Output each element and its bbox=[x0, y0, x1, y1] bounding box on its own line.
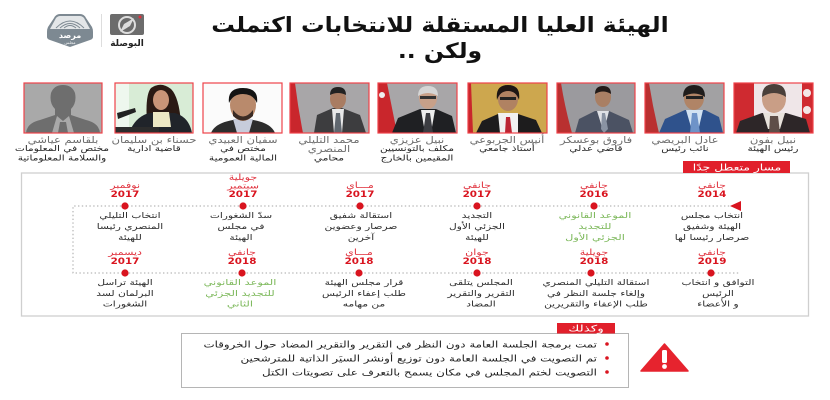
event: Nov 2017 bbox=[97, 181, 163, 243]
also label: وكذلك bbox=[568, 323, 604, 335]
event: Jun 2018: المضاد bbox=[466, 300, 496, 309]
event: Jul-Sep 2017: جويلية bbox=[229, 173, 257, 183]
event: May 2018: 2018 bbox=[345, 257, 373, 267]
logo: alboussala: البوصلة bbox=[110, 39, 144, 49]
event: Jan 2019: و الأعضاء bbox=[697, 299, 739, 309]
member 7: Farouk bbox=[557, 83, 635, 154]
bullet 1: تمت برمجة الجلسة العامة دون النظر في التقرير والتقرير المضاد حول الخروقات bbox=[203, 340, 597, 350]
event: Jun 2018: جوان bbox=[465, 248, 489, 258]
event: Jul-Sep 2017: سبتمبر bbox=[226, 182, 259, 191]
event: Jan 2017: الجزئي الأول bbox=[449, 221, 505, 232]
event: Jan 2014: انتخاب مجلس bbox=[681, 211, 743, 221]
event: Jun 2018: 2018 bbox=[463, 257, 491, 267]
event: Jul 2018: استقالة التليلي المنصري bbox=[543, 278, 649, 288]
event: Dec 2017 bbox=[96, 248, 154, 309]
panel: timeline bbox=[22, 161, 808, 316]
event: Jan 2014: صرصار رئيسا لها bbox=[675, 233, 749, 243]
member 2: Hasna bbox=[111, 83, 197, 154]
event: Jan 2017: 2017 bbox=[463, 190, 491, 200]
icon: warning triangle bbox=[641, 344, 688, 371]
event: Jan 2017 bbox=[449, 181, 505, 243]
event: Jan 2017: التجديد bbox=[462, 211, 492, 221]
title: الهيئة العليا المستقلة للانتخابات اكتملت bbox=[211, 13, 669, 38]
event: Jan 2019: الرئيس bbox=[702, 289, 734, 299]
bullet 3: التصويت لختم المجلس في مكان يسمح بالتعرف على تصويتات الكتل bbox=[262, 368, 597, 378]
member 1: Belgacem bbox=[15, 83, 109, 163]
member 1: Belgacem: والسلامة المعلوماتية bbox=[18, 154, 106, 163]
event: Jan 2016: الجزئي الأول bbox=[565, 232, 625, 242]
event: Dec 2017: 2017 bbox=[111, 257, 139, 267]
member 6: Anis Jarboui: أنيس الجربوعي bbox=[470, 133, 544, 146]
logo: alboussala bbox=[110, 14, 144, 49]
member 5: Nabil Azizi: المقيمين بالخارج bbox=[381, 154, 453, 163]
member 5: Nabil Azizi: مكلف بالتونسيين bbox=[380, 144, 454, 154]
member 3: Sofiane: مختص في bbox=[220, 144, 266, 154]
member 4: Mohamed Tlili: محمد التليلي bbox=[298, 135, 360, 146]
member 6: Anis Jarboui bbox=[468, 83, 547, 154]
member 9: Nabil Baffoun: نبيل بفون bbox=[750, 135, 796, 146]
event: May 2017: آخرين bbox=[348, 232, 375, 243]
event: Jul 2018: طلب الإعفاء والتقريرين bbox=[544, 300, 648, 309]
timeline arrow bbox=[730, 201, 741, 211]
event: Jan 2018: الثاني bbox=[227, 300, 253, 309]
event: Jan 2019: جانفي bbox=[698, 248, 726, 258]
member 6: Anis Jarboui: أستاذ جامعي bbox=[479, 142, 535, 154]
event: Jan 2014: الهيئة وشفيق bbox=[683, 222, 741, 232]
member 9: Nabil Baffoun: رئيس الهيئة bbox=[747, 144, 799, 154]
event: Jul-Sep 2017: في مجلس bbox=[218, 222, 264, 232]
event: Jun 2018: التقرير والتقرير bbox=[446, 289, 515, 299]
member 2: Hasna: حسناء بن سليمان bbox=[111, 135, 197, 146]
panel: also notes bbox=[182, 323, 628, 388]
event: Nov 2017: نوفمبر bbox=[109, 181, 140, 191]
member 5: Nabil Azizi: نبيل عزيزي bbox=[390, 135, 444, 146]
member 7: Farouk: قاضي عدلي bbox=[569, 144, 623, 154]
event: Jul 2018 bbox=[543, 248, 649, 309]
member 1: Belgacem: مختص في المعلومات bbox=[15, 144, 109, 154]
event: Jan 2019 bbox=[682, 248, 754, 309]
event: May 2017: مـــاي bbox=[346, 181, 374, 191]
member 4: Mohamed Tlili: المنصري bbox=[308, 144, 350, 155]
event: Nov 2017: للهيئة bbox=[118, 233, 142, 243]
event: May 2018: من مهامه bbox=[343, 300, 385, 309]
member 4: Mohamed Tlili: محامي bbox=[314, 154, 344, 163]
event: Jan 2016 bbox=[559, 181, 631, 242]
event: May 2017: استقالة شفيق bbox=[330, 211, 392, 221]
event: Jul-Sep 2017 bbox=[210, 173, 272, 243]
member 4: Mohamed Tlili bbox=[290, 83, 369, 163]
event: Jul-Sep 2017: 2017 bbox=[229, 190, 257, 200]
event: May 2018: قرار مجلس الهيئة bbox=[325, 278, 403, 288]
event: Jan 2019: التوافق و انتخاب bbox=[682, 278, 754, 288]
event: May 2018: طلب إعفاء الرئيس bbox=[322, 289, 406, 299]
logo divider bbox=[101, 14, 102, 47]
member 3: Sofiane bbox=[203, 83, 282, 163]
timeline label: مسار متعطل جدًا bbox=[693, 162, 781, 173]
event: May 2017 bbox=[325, 181, 397, 243]
member 8: Adel Brinsi: نائب رئيس bbox=[661, 144, 709, 154]
event: Nov 2017: 2017 bbox=[111, 190, 139, 200]
event: May 2017: صرصار وعضوين bbox=[325, 222, 397, 232]
bullet 2: تم التصويت في الجلسة العامة دون توزيع أونشر السيَر الذاتية للمترشحين bbox=[241, 352, 597, 364]
title bbox=[211, 13, 669, 64]
event: Jan 2014: جانفي bbox=[698, 181, 726, 191]
event: Jan 2018: الموعد القانوني bbox=[204, 278, 276, 287]
event: Dec 2017: البرلمان لسد bbox=[96, 289, 154, 299]
member 1: Belgacem: بلقاسم عياشي bbox=[28, 135, 98, 146]
event: Nov 2017: المنصري رئيسا bbox=[97, 222, 163, 232]
event: Jan 2014 bbox=[675, 181, 749, 243]
event: Dec 2017: الشغورات bbox=[103, 300, 147, 309]
event: Jan 2016: 2016 bbox=[580, 190, 609, 200]
event: May 2017: 2017 bbox=[346, 190, 374, 200]
member 5: Nabil Azizi bbox=[378, 83, 457, 163]
logo: marsad: مرصد bbox=[59, 31, 81, 40]
member 3: Sofiane: سفيان العبيدي bbox=[208, 135, 278, 146]
event: Dec 2017: الهيئة تراسل bbox=[97, 278, 153, 288]
event: Nov 2017: انتخاب التليلي bbox=[99, 211, 161, 221]
event: Jan 2018: للتجديد الجزئي bbox=[205, 289, 275, 298]
member 8: Adel Brinsi: عادل البريصي bbox=[651, 135, 719, 146]
event: Jul 2018: وإلغاء جلسة النظر في bbox=[547, 289, 645, 299]
event: Jun 2018: المجلس يتلقى bbox=[449, 278, 513, 288]
event: Jan 2017: للهيئة bbox=[465, 233, 489, 243]
event: Jul 2018: 2018 bbox=[580, 257, 608, 267]
logo: marsad bbox=[47, 14, 93, 47]
member 7: Farouk: فاروق بوعسكر bbox=[559, 135, 632, 146]
event: Jan 2016: الموعد القانوني bbox=[559, 211, 631, 220]
event: Jan 2016: للتجديد bbox=[578, 222, 612, 231]
event: Jan 2018 bbox=[204, 248, 276, 309]
event: Jun 2018 bbox=[446, 248, 515, 309]
logo: marsad: مجلس bbox=[64, 40, 76, 45]
member 9: Nabil Baffoun bbox=[734, 83, 813, 154]
event: Jan 2018: 2018 bbox=[228, 257, 256, 267]
event: Jan 2018: جانفي bbox=[228, 248, 256, 258]
event: Jan 2017: جانفي bbox=[463, 181, 491, 191]
title: ولكن .. bbox=[398, 39, 482, 64]
event: Jul-Sep 2017: الهيئة bbox=[229, 233, 253, 243]
also label bbox=[557, 323, 615, 335]
event: Jul-Sep 2017: سدّ الشغورات bbox=[210, 211, 272, 221]
event: Jan 2014: 2014 bbox=[698, 190, 727, 200]
member 8: Adel Brinsi bbox=[645, 83, 724, 154]
event: Jul 2018: جويلية bbox=[580, 248, 608, 258]
event: May 2018: مـــاي bbox=[345, 248, 373, 258]
event: Jan 2016: جانفي bbox=[580, 181, 608, 191]
event: Jan 2019: 2019 bbox=[698, 257, 726, 267]
event: Dec 2017: ديسمبر bbox=[107, 248, 142, 258]
event: May 2018 bbox=[322, 248, 406, 309]
member 3: Sofiane: المالية العمومية bbox=[209, 154, 277, 163]
timeline dotted path bbox=[73, 206, 740, 273]
member 2: Hasna: قاضية ادارية bbox=[127, 144, 181, 154]
